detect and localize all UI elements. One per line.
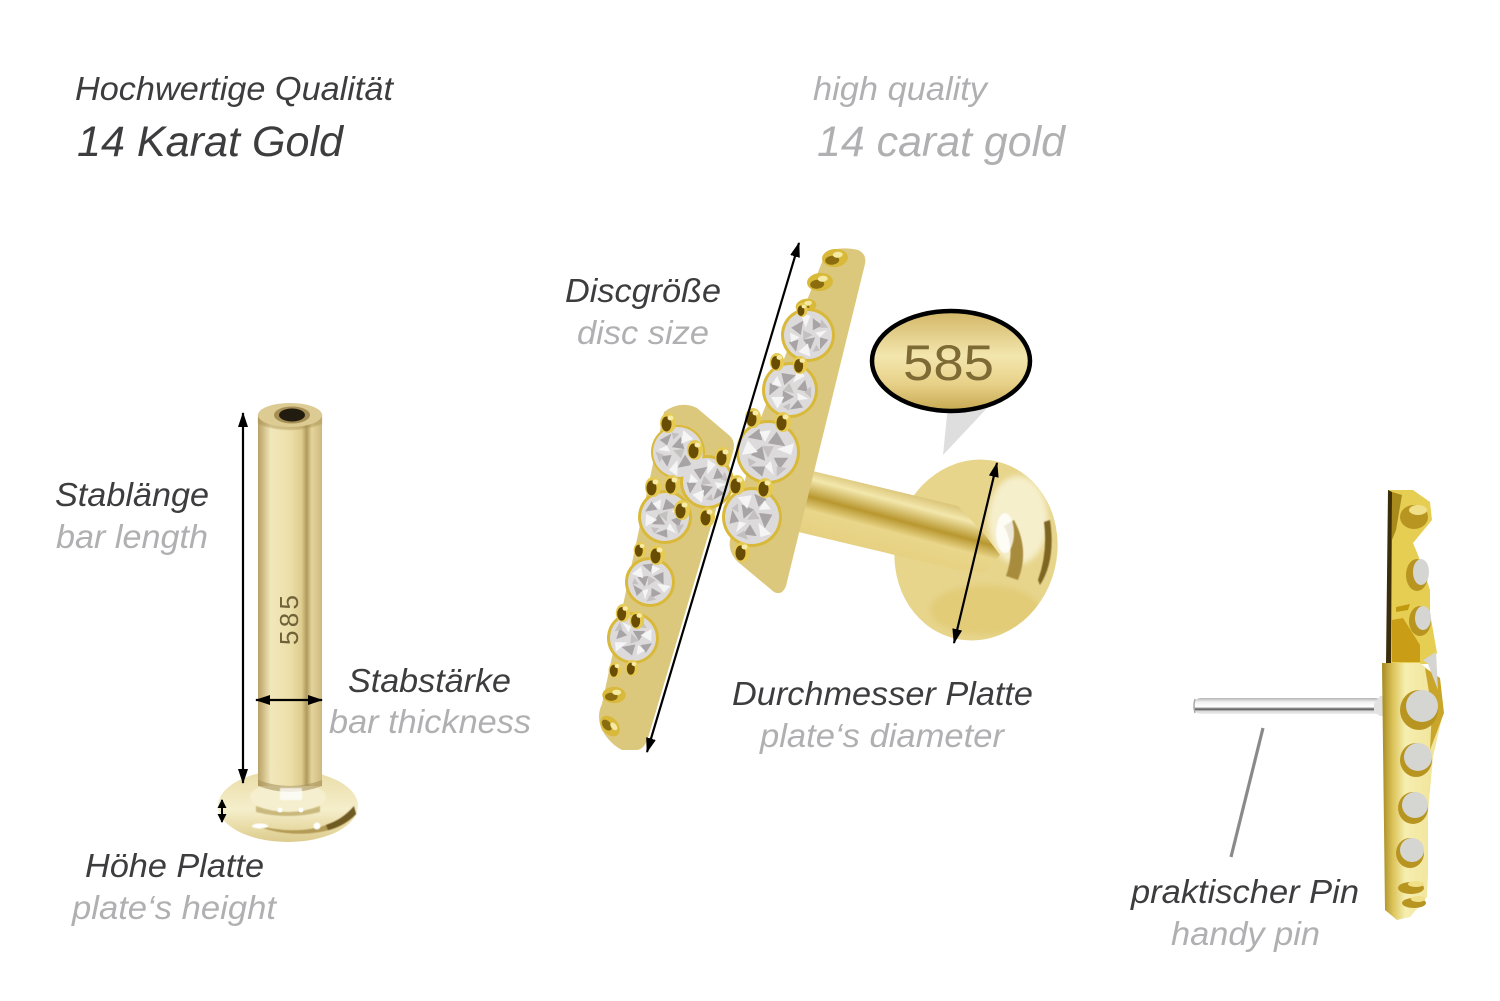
arrow: bar thickness — [256, 699, 322, 701]
pointer line: handy pin — [1231, 728, 1263, 857]
bar stamp 585: 585 — [274, 595, 304, 645]
label: plate height: Höhe Platte — [85, 847, 264, 884]
arrow: plate height — [221, 800, 223, 822]
stem — [790, 468, 1000, 572]
title: English heading — [813, 70, 1067, 166]
label: plate diameter: Durchmesser Platte — [732, 675, 1033, 712]
label: handy pin: praktischer Pin — [1130, 873, 1359, 910]
label: plate diameter: plate‘s diameter — [759, 717, 1006, 754]
label: plate height — [71, 847, 278, 926]
base plate — [218, 770, 358, 842]
label: disc size: Discgröße — [565, 272, 721, 309]
label: bar length: bar length — [56, 518, 208, 555]
arrow: disc size — [647, 243, 799, 752]
label: plate diameter — [732, 675, 1033, 754]
illustration: lightning bolt stud, front view — [596, 248, 1077, 750]
label: handy pin — [1130, 873, 1359, 952]
bolt upper piece — [730, 248, 865, 593]
callout: 585 stamp: 585 — [903, 335, 994, 391]
bolt lower piece — [599, 405, 734, 750]
label: handy pin: handy pin — [1171, 915, 1320, 952]
title: German heading — [75, 70, 395, 166]
side end prongs — [1408, 505, 1427, 902]
illustration: stud side view with pin — [1193, 490, 1444, 920]
illustration: threaded bar with plate — [218, 403, 358, 842]
title: English heading: 14 carat gold — [817, 118, 1067, 166]
label: disc size: disc size — [577, 314, 709, 351]
title: German heading: Hochwertige Qualität — [75, 70, 395, 107]
label: bar length — [55, 476, 209, 555]
end blobs — [596, 248, 849, 740]
pin — [1193, 696, 1384, 716]
title: English heading: high quality — [813, 70, 990, 107]
gems — [604, 311, 832, 667]
side gem settings — [1396, 505, 1438, 908]
upper side piece — [1388, 490, 1437, 664]
bar body — [258, 414, 322, 800]
callout pointer — [943, 405, 990, 455]
back plate — [894, 460, 1058, 640]
title: German heading: 14 Karat Gold — [77, 118, 345, 166]
prongs — [609, 303, 808, 678]
label: plate height: plate‘s height — [71, 889, 278, 926]
label: disc size — [565, 272, 721, 351]
gem settings — [607, 308, 835, 664]
label: bar thickness: Stabstärke — [348, 662, 511, 699]
lower side piece — [1382, 663, 1443, 920]
label: bar length: Stablänge — [55, 476, 209, 513]
bar top and hole — [258, 403, 322, 427]
label: bar thickness — [329, 662, 531, 740]
arrow: bar length — [242, 413, 244, 783]
side gems — [1400, 559, 1438, 862]
arrow: plate diameter — [954, 463, 997, 643]
callout: 585 stamp — [872, 311, 1030, 411]
label: bar thickness: bar thickness — [329, 703, 531, 740]
